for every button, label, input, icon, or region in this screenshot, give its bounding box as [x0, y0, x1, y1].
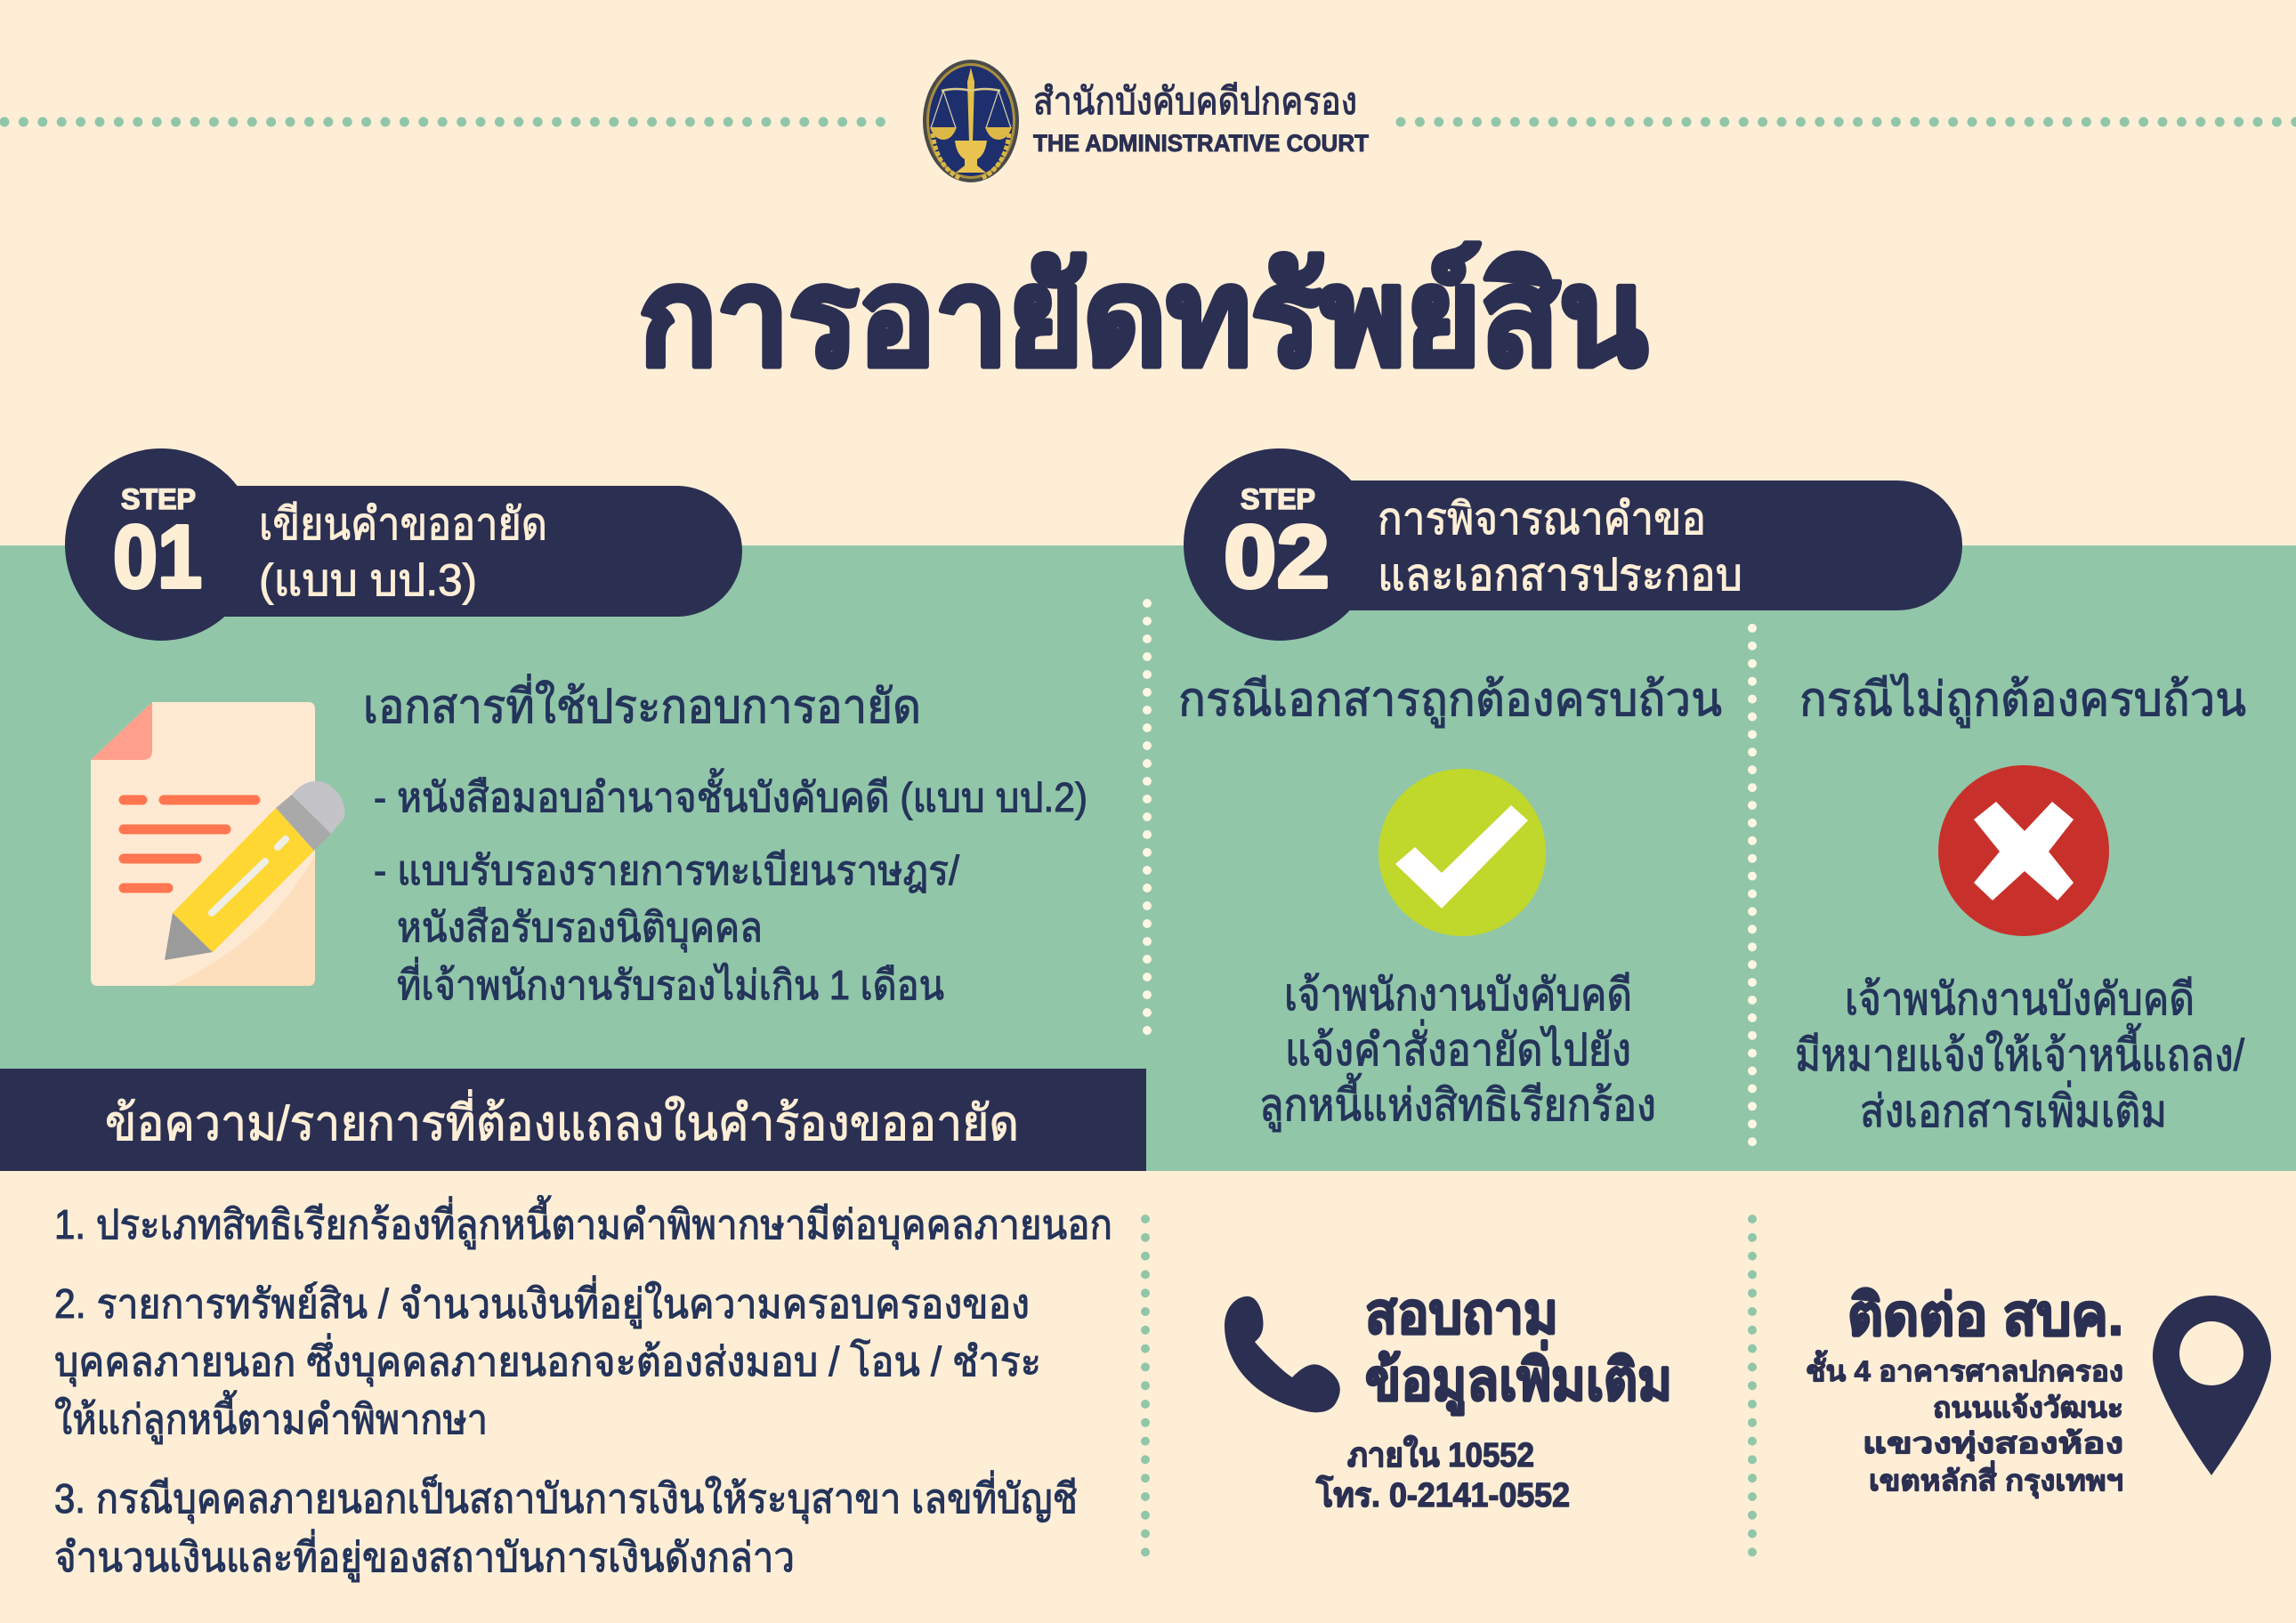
- step 01 badge: เขียนคำขออายัด: [259, 499, 547, 549]
- step 01 badge: (แบบ บป.3): [259, 555, 477, 605]
- header organisation name: สำนักบังคับคดีปกครอง: [1033, 80, 1357, 122]
- icon: location pin: [2153, 1296, 2271, 1475]
- panel: required documents: ที่เจ้าพนักงานรับรองไม่เกิน 1 เดือน: [397, 957, 944, 1008]
- step 02 badge: 02: [1224, 507, 1330, 607]
- panel: required documents: หนังสือรับรองนิติบุคคล: [397, 904, 763, 953]
- panel: contact address: เขตหลักสี่ กรุงเทพฯ: [1869, 1460, 2123, 1499]
- list: items to state in the request: [54, 1195, 1112, 1582]
- step 01 badge: STEP: [121, 483, 196, 515]
- panel: contact address: [1806, 1283, 2123, 1499]
- panel: documents incomplete: เจ้าพนักงานบังคับคดี: [1845, 974, 2195, 1024]
- panel: documents incomplete: [1795, 673, 2246, 1136]
- panel: documents complete: เจ้าพนักงานบังคับคดี: [1284, 970, 1632, 1020]
- green band: [0, 545, 2296, 1171]
- panel: documents complete: [1178, 674, 1722, 1132]
- dark banner heading: ข้อความ/รายการที่ต้องแถลงในคำร้องขออายัด: [105, 1089, 1019, 1151]
- panel: further enquiries: [1315, 1281, 1672, 1514]
- panel: contact address: ติดต่อ สบค.: [1847, 1283, 2123, 1347]
- list: items to state in the request: 2. รายการทรัพย์สิน / จำนวนเงินที่อยู่ในความครอบครองของ: [54, 1275, 1030, 1328]
- step 02 badge: [1184, 448, 1962, 641]
- panel: contact address: แขวงทุ่งสองห้อง: [1863, 1427, 2123, 1462]
- panel: required documents: - หนังสือมอบอำนาจชั้นบังคับคดี (แบบ บป.2): [374, 768, 1087, 820]
- panel: documents complete: กรณีเอกสารถูกต้องครบถ้วน: [1178, 674, 1722, 728]
- step 02 badge: การพิจารณาคำขอ: [1378, 494, 1706, 544]
- panel: further enquiries: ภายใน 10552: [1347, 1435, 1534, 1474]
- header organisation name: THE ADMINISTRATIVE COURT: [1033, 130, 1369, 157]
- list: items to state in the request: จำนวนเงินและที่อยู่ของสถาบันการเงินดังกล่าว: [54, 1529, 795, 1582]
- icon: telephone: [1225, 1296, 1340, 1412]
- panel: required documents: เอกสารที่ใช้ประกอบการอายัด: [363, 674, 921, 733]
- list: items to state in the request: 1. ประเภทสิทธิเรียกร้องที่ลูกหนี้ตามคำพิพากษามีต่อบุคคลภายนอก: [54, 1195, 1112, 1250]
- panel: documents complete: แจ้งคำสั่งอายัดไปยัง: [1285, 1020, 1631, 1075]
- header organisation name: [1033, 80, 1369, 157]
- panel: documents complete: ลูกหนี้แห่งสิทธิเรียกร้อง: [1259, 1073, 1656, 1132]
- list: items to state in the request: 3. กรณีบุคคลภายนอกเป็นสถาบันการเงินให้ระบุสาขา เลขที่บัญชี: [54, 1470, 1078, 1524]
- panel: documents incomplete: มีหมายแจ้งให้เจ้าหนี้แถลง/: [1795, 1023, 2244, 1080]
- panel: required documents: [363, 674, 1087, 1008]
- panel: further enquiries: สอบถาม: [1365, 1281, 1558, 1345]
- panel: required documents: - แบบรับรองรายการทะเบียนราษฎร/: [374, 847, 959, 893]
- title: การอายัดทรัพย์สิน: [639, 242, 1647, 392]
- panel: further enquiries: ข้อมูลเพิ่มเติม: [1365, 1340, 1672, 1416]
- panel: documents incomplete: ส่งเอกสารเพิ่มเติม: [1860, 1081, 2167, 1136]
- step 01 badge: 01: [113, 507, 202, 607]
- step 02 badge: STEP: [1241, 483, 1315, 515]
- panel: contact address: ชั้น 4 อาคารศาลปกครอง: [1806, 1350, 2123, 1387]
- panel: contact address: ถนนแจ้งวัฒนะ: [1933, 1392, 2123, 1424]
- list: items to state in the request: ให้แก่ลูกหนี้ตามคำพิพากษา: [54, 1390, 488, 1444]
- step 01 badge: [65, 448, 742, 641]
- panel: further enquiries: โทร. 0-2141-0552: [1315, 1474, 1570, 1514]
- dark banner heading: [0, 1069, 1146, 1171]
- list: items to state in the request: บุคคลภายนอก ซึ่งบุคคลภายนอกจะต้องส่งมอบ / โอน / ชำระ: [54, 1333, 1041, 1387]
- panel: documents incomplete: กรณีไม่ถูกต้องครบถ้วน: [1799, 673, 2246, 728]
- header logo: Administrative Court emblem: [923, 60, 1019, 182]
- icon: document with pencil: [91, 702, 344, 986]
- step 02 badge: และเอกสารประกอบ: [1378, 550, 1742, 600]
